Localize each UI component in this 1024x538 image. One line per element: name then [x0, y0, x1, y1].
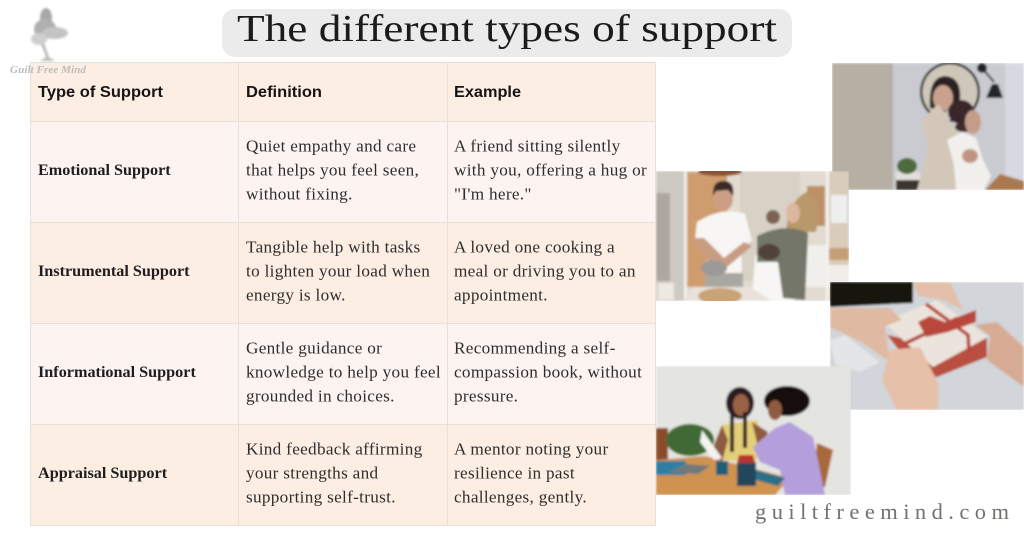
row: appraisal support: your strengths and [246, 464, 378, 482]
photo: hands exchanging gift box [830, 282, 1024, 410]
row: emotional support: without fixing. [246, 184, 353, 204]
woman left [726, 387, 754, 419]
woman [786, 192, 818, 232]
row: emotional support: Emotional Support [38, 161, 171, 179]
row: instrumental support: A loved one cooking a [454, 238, 615, 256]
row: informational support [30, 323, 656, 424]
row: instrumental support: appointment. [454, 286, 548, 304]
row: appraisal support: resilience in past [454, 464, 575, 482]
row: informational support: grounded in choices. [246, 386, 395, 406]
row: instrumental support: meal or driving you to an [454, 262, 636, 280]
title [222, 8, 792, 57]
row: appraisal support: supporting self-trust. [246, 488, 396, 506]
row: instrumental support: Tangible help with tasks [246, 238, 421, 256]
row: emotional support: A friend sitting silently [454, 136, 621, 156]
row: emotional support [30, 121, 656, 222]
row: instrumental support: to lighten your load when [246, 262, 430, 280]
table: types of support [30, 62, 656, 526]
title: The different types of support [237, 8, 777, 50]
row: emotional support: "I'm here." [454, 184, 532, 204]
website url: guiltfreemind.com [755, 499, 1009, 524]
row: informational support: compassion book, without [454, 362, 642, 382]
header row: Type of Support [38, 84, 164, 101]
table objects [656, 461, 686, 475]
header row: Definition [246, 84, 322, 101]
row: emotional support: with you, offering a hug or [454, 160, 647, 180]
logo: tree and script name: Guilt Free Mind [10, 65, 87, 76]
counter [682, 287, 772, 301]
row: informational support: Informational Support [38, 363, 196, 381]
row: instrumental support: Instrumental Support [38, 262, 190, 280]
photo: two women studying at a table [656, 366, 851, 495]
photo: mother hugging child [832, 62, 1024, 190]
row: informational support: knowledge to help you feel [246, 362, 441, 382]
row: emotional support: that helps you feel seen, [246, 160, 419, 180]
woman right [764, 386, 810, 416]
row: appraisal support [30, 424, 656, 525]
row: instrumental support [30, 222, 656, 323]
header row: Example [454, 84, 521, 101]
row: appraisal support: Kind feedback affirming [246, 440, 423, 458]
row: appraisal support: A mentor noting your [454, 440, 608, 458]
row: emotional support: Quiet empathy and care [246, 136, 416, 156]
row: appraisal support: challenges, gently. [454, 488, 587, 506]
header row [30, 62, 656, 121]
row: informational support: Recommending a self- [454, 338, 616, 358]
photo: couple cooking in kitchen [656, 168, 849, 304]
row: appraisal support: Appraisal Support [38, 464, 168, 482]
logo: tree and script name [10, 8, 87, 76]
row: informational support: Gentle guidance or [246, 338, 382, 358]
row: instrumental support: energy is low. [246, 286, 346, 304]
row: informational support: pressure. [454, 386, 518, 406]
man [713, 187, 733, 211]
